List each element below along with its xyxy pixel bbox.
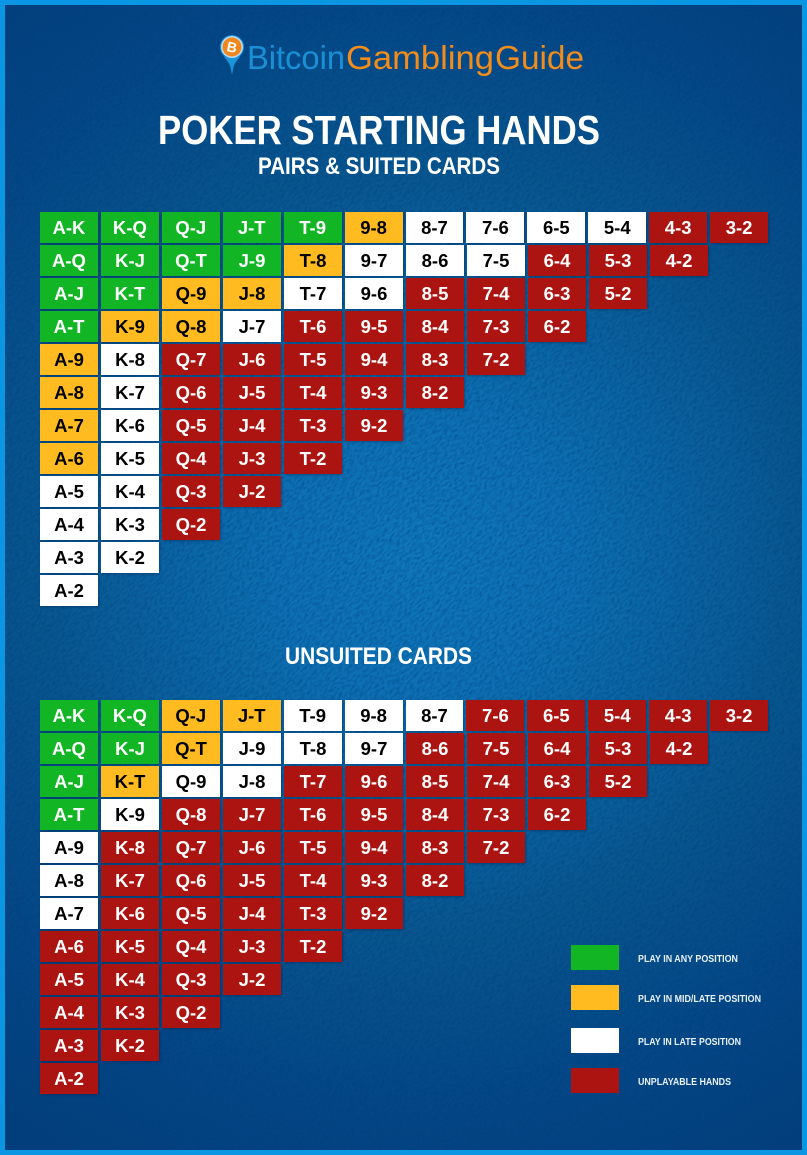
row: A-7: K-6	[115, 415, 145, 436]
row: A-7: A-7	[54, 903, 84, 924]
row: A-4: Q-2	[176, 514, 206, 535]
row: A-5: Q-3	[176, 969, 206, 990]
row: A-K: 9-8	[360, 705, 387, 726]
row: A-Q: 5-3	[605, 250, 631, 271]
row: A-Q: T-8	[300, 250, 326, 271]
row: A-Q: 7-5	[483, 250, 509, 271]
row: A-K: 4-3	[665, 217, 692, 238]
legend item: unplayable hands	[571, 1068, 731, 1093]
row: A-9: 9-4	[361, 837, 387, 858]
row: A-J: 6-3	[544, 283, 570, 304]
row: A-6: K-5	[115, 936, 145, 957]
row: A-K: 6-5	[543, 217, 570, 238]
row: A-6: T-2	[300, 936, 326, 957]
row: A-J: 7-4	[483, 283, 509, 304]
row: A-6: Q-4	[176, 448, 206, 469]
row: A-8	[40, 865, 466, 898]
row: A-9	[40, 832, 526, 864]
row: A-9: T-5	[300, 349, 326, 370]
row: A-T: 9-5	[361, 804, 387, 825]
row: A-5: J-2	[239, 969, 265, 990]
row: A-Q: 8-6	[422, 250, 448, 271]
row: A-Q: 6-4	[544, 250, 570, 271]
row: A-Q: K-J	[115, 250, 145, 271]
legend item: play in mid/late position	[571, 985, 761, 1010]
row: A-T	[40, 311, 588, 344]
row: A-8: A-8	[54, 382, 84, 403]
row: A-2: A-2	[54, 1068, 84, 1089]
row: A-5: Q-3	[176, 481, 206, 502]
row: A-6: J-3	[239, 936, 265, 957]
row: A-J: Q-9	[176, 771, 206, 792]
legend item: play in any position: PLAY IN ANY POSITION	[638, 954, 738, 965]
row: A-T: 6-2	[544, 804, 570, 825]
row: A-9: Q-7	[176, 837, 206, 858]
row: A-J: T-7	[300, 283, 326, 304]
row: A-Q: 5-3	[605, 738, 631, 759]
row: A-K: 5-4	[604, 217, 631, 238]
row: A-K: 8-7	[421, 217, 448, 238]
row: A-Q: J-9	[239, 738, 265, 759]
row: A-K	[40, 700, 770, 733]
row: A-5: K-4	[115, 481, 145, 502]
row: A-8: 8-2	[422, 870, 448, 891]
row: A-7: Q-5	[176, 415, 206, 436]
row: A-5	[40, 964, 282, 996]
row: A-9: 8-3	[422, 349, 448, 370]
row: A-Q: 6-4	[544, 738, 570, 759]
row: A-K: K-Q	[113, 217, 147, 238]
row: A-K: 7-6	[482, 217, 509, 238]
row: A-K: 9-8	[360, 217, 387, 238]
row: A-J: 9-6	[361, 771, 387, 792]
row: A-Q: T-8	[300, 738, 326, 759]
row: A-Q	[40, 733, 710, 766]
row: A-Q: Q-T	[175, 738, 207, 759]
row: A-3	[40, 542, 161, 575]
row: A-6: J-3	[239, 448, 265, 469]
row: A-6: T-2	[300, 448, 326, 469]
row: A-T: 9-5	[361, 316, 387, 337]
row: A-Q: 7-5	[483, 738, 509, 759]
row: A-K: 4-3	[665, 705, 692, 726]
row: A-T: 7-3	[483, 804, 509, 825]
chart: unsuited cards	[40, 700, 770, 1096]
row: A-Q: Q-T	[175, 250, 207, 271]
chart: pairs and suited cards	[40, 212, 770, 608]
row: A-K: A-K	[53, 217, 85, 238]
row: A-J: 5-2	[605, 283, 631, 304]
row: A-J: 9-6	[361, 283, 387, 304]
row: A-9: T-5	[300, 837, 326, 858]
row: A-J: A-J	[54, 771, 84, 792]
row: A-Q: 9-7	[361, 738, 387, 759]
row: A-9: J-6	[239, 349, 265, 370]
row: A-3	[40, 1030, 160, 1062]
row: A-J: 8-5	[422, 283, 448, 304]
row: A-3: A-3	[54, 1035, 84, 1056]
row: A-T: 8-4	[422, 316, 448, 337]
row: A-7: J-4	[239, 903, 265, 924]
row: A-T: T-6	[300, 804, 326, 825]
row: A-6	[40, 931, 344, 964]
row: A-J: 8-5	[422, 771, 448, 792]
row: A-K: K-Q	[113, 705, 147, 726]
row: A-8: 9-3	[361, 870, 387, 891]
row: A-7: T-3	[300, 903, 326, 924]
row: A-J: Q-9	[176, 283, 206, 304]
row: A-K: Q-J	[175, 217, 206, 238]
row: A-4: Q-2	[176, 1002, 206, 1023]
row: A-9: 8-3	[422, 837, 448, 858]
row: A-J: J-8	[239, 283, 265, 304]
row: A-T: J-7	[239, 804, 265, 825]
row: A-5: J-2	[239, 481, 265, 502]
row: A-Q: 4-2	[666, 250, 692, 271]
row: A-8: J-5	[239, 870, 265, 891]
row: A-T	[40, 799, 588, 832]
row: A-8: A-8	[54, 870, 84, 891]
row: A-9: Q-7	[176, 349, 206, 370]
row: A-J: 5-2	[605, 771, 631, 792]
row: A-4	[40, 509, 222, 542]
row: A-7: 9-2	[361, 415, 387, 436]
row: A-8: K-7	[115, 382, 145, 403]
row: A-8: K-7	[115, 870, 145, 891]
row: A-9: J-6	[239, 837, 265, 858]
row: A-4: A-4	[54, 1002, 84, 1023]
row: A-3: A-3	[54, 547, 84, 568]
row: A-8: Q-6	[176, 870, 206, 891]
row: A-J: K-T	[115, 771, 145, 792]
row: A-T: J-7	[239, 316, 265, 337]
legend	[571, 945, 761, 1093]
row: A-4	[40, 997, 222, 1030]
row: A-Q: 4-2	[666, 738, 692, 759]
row: A-8: 9-3	[361, 382, 387, 403]
row: A-T: Q-8	[176, 804, 206, 825]
row: A-Q: K-J	[115, 738, 145, 759]
row: A-9: K-8	[115, 837, 145, 858]
row: A-J: T-7	[300, 771, 326, 792]
row: A-T: A-T	[54, 316, 84, 337]
row: A-9: A-9	[54, 349, 84, 370]
row: A-5: A-5	[54, 969, 84, 990]
row: A-5	[40, 476, 283, 509]
row: A-K: J-T	[238, 705, 266, 726]
legend item: play in late position	[571, 1028, 741, 1053]
row: A-K: T-9	[299, 217, 326, 238]
row: A-5: K-4	[115, 969, 145, 990]
row: A-8	[40, 377, 466, 410]
row: A-3: K-2	[115, 547, 145, 568]
legend item: play in late position: PLAY IN LATE POSITION	[638, 1037, 741, 1048]
row: A-T: Q-8	[176, 316, 206, 337]
row: A-9: A-9	[54, 837, 84, 858]
row: A-4: A-4	[54, 514, 84, 535]
row: A-J	[40, 278, 648, 311]
row: A-7	[40, 898, 404, 930]
row: A-K: 3-2	[726, 217, 752, 238]
row: A-4: K-3	[115, 514, 145, 535]
row: A-K: 5-4	[604, 705, 631, 726]
row: A-8: Q-6	[176, 382, 206, 403]
icon: map pin with bitcoin coin	[220, 35, 244, 75]
row: A-6	[40, 443, 344, 476]
row: A-K: T-9	[299, 705, 326, 726]
row: A-T: K-9	[115, 316, 145, 337]
row: A-Q: 9-7	[361, 250, 387, 271]
row: A-J: A-J	[54, 283, 84, 304]
logo wordmark: Guide	[495, 39, 584, 76]
row: A-J	[40, 766, 648, 799]
icon: map pin with bitcoin coin: B	[225, 38, 239, 56]
logo wordmark: Bitcoin	[247, 39, 345, 76]
row: A-K	[40, 212, 770, 244]
row: A-K: 8-7	[421, 705, 448, 726]
row: A-J: K-T	[115, 283, 145, 304]
logo: BitcoinGamblingGuide	[220, 35, 584, 76]
row: A-8: T-4	[300, 870, 326, 891]
row: A-Q: A-Q	[52, 250, 86, 271]
row: A-9: 7-2	[483, 837, 509, 858]
row: A-6: A-6	[54, 936, 84, 957]
row: A-Q	[40, 245, 710, 278]
row: A-Q: 8-6	[422, 738, 448, 759]
row: A-T: 8-4	[422, 804, 448, 825]
row: A-3: K-2	[115, 1035, 145, 1056]
row: A-K: Q-J	[175, 705, 206, 726]
row: A-K: A-K	[53, 705, 85, 726]
row: A-K: 7-6	[482, 705, 509, 726]
row: A-K: J-T	[238, 217, 266, 238]
row: A-6: A-6	[54, 448, 84, 469]
row: A-9: 9-4	[361, 349, 387, 370]
row: A-5: A-5	[54, 481, 84, 502]
row: A-7	[40, 410, 405, 443]
row: A-2: A-2	[54, 580, 84, 601]
legend item: unplayable hands: UNPLAYABLE HANDS	[638, 1077, 731, 1088]
row: A-6: K-5	[115, 448, 145, 469]
row: A-7: 9-2	[361, 903, 387, 924]
row: A-Q: A-Q	[52, 738, 86, 759]
row: A-Q: J-9	[239, 250, 265, 271]
row: A-4: K-3	[115, 1002, 145, 1023]
row: A-J: J-8	[239, 771, 265, 792]
row: A-T: 7-3	[483, 316, 509, 337]
row: A-9: K-8	[115, 349, 145, 370]
row: A-J: 6-3	[544, 771, 570, 792]
row: A-T: K-9	[115, 804, 145, 825]
row: A-J: 7-4	[483, 771, 509, 792]
row: A-8: J-5	[239, 382, 265, 403]
row: A-T: A-T	[54, 804, 84, 825]
row: A-7: T-3	[300, 415, 326, 436]
row: A-T: T-6	[300, 316, 326, 337]
row: A-7: A-7	[54, 415, 84, 436]
legend item: play in any position	[571, 945, 738, 970]
row: A-K: 3-2	[726, 705, 752, 726]
row: A-9	[40, 344, 527, 377]
logo wordmark: Gambling	[346, 39, 494, 76]
row: A-7: J-4	[239, 415, 265, 436]
row: A-K: 6-5	[543, 705, 570, 726]
row: A-7: Q-5	[176, 903, 206, 924]
row: A-7: K-6	[115, 903, 145, 924]
row: A-9: 7-2	[483, 349, 509, 370]
row: A-T: 6-2	[544, 316, 570, 337]
logo wordmark	[247, 39, 584, 76]
row: A-8: T-4	[300, 382, 326, 403]
row: A-8: 8-2	[422, 382, 448, 403]
row: A-6: Q-4	[176, 936, 206, 957]
